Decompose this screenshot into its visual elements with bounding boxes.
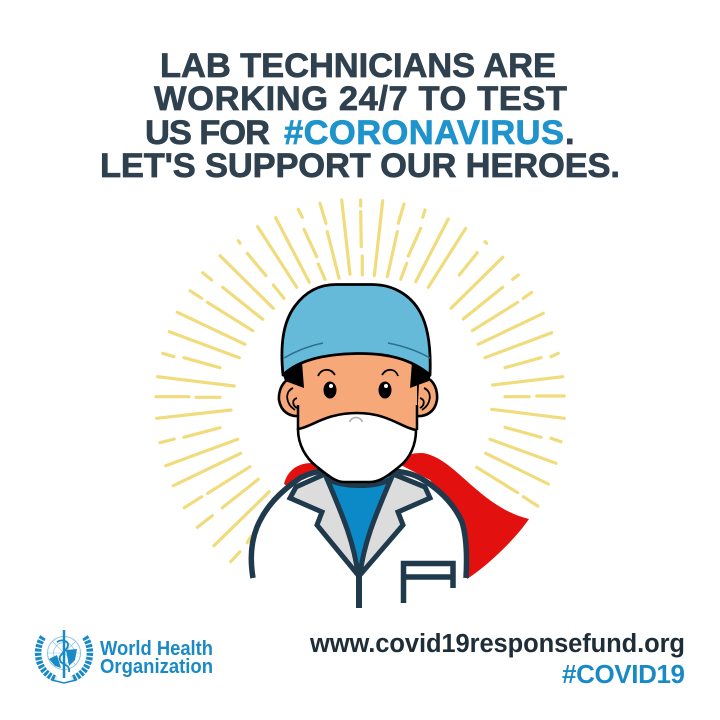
hashtag in title: #CORONAVIRUS xyxy=(284,114,564,152)
sunburst rays xyxy=(156,200,564,562)
coat centre line xyxy=(356,572,362,608)
WHO emblem xyxy=(38,630,90,683)
title xyxy=(100,47,620,185)
coat outline xyxy=(251,471,467,578)
COVID19 hashtag: #COVID19 xyxy=(562,659,685,689)
eyes xyxy=(324,382,392,398)
face mask xyxy=(298,413,416,482)
title: LET'S SUPPORT OUR HEROES. xyxy=(100,147,620,185)
cap folds xyxy=(284,343,430,358)
title: . xyxy=(565,114,575,152)
WHO logo xyxy=(38,630,213,683)
coat lapels xyxy=(290,474,430,575)
surgical cap xyxy=(282,284,430,375)
fund website: www.covid19responsefund.org xyxy=(309,630,685,658)
face outline xyxy=(298,405,417,430)
red cape xyxy=(284,453,529,579)
eyebrows xyxy=(318,370,398,376)
coat pocket xyxy=(403,564,453,603)
title: WORKING 24/7 TO TEST xyxy=(154,80,567,118)
hair xyxy=(283,362,431,388)
blue shirt xyxy=(326,476,392,572)
title: US FOR xyxy=(145,114,270,152)
ears xyxy=(279,377,437,416)
WHO wordmark xyxy=(100,637,213,678)
mask nose crease xyxy=(350,418,362,422)
white lab coat xyxy=(251,471,467,608)
lab technician hero illustration xyxy=(251,284,529,608)
title: LAB TECHNICIANS ARE xyxy=(160,47,556,85)
WHO wordmark: Organization xyxy=(100,655,213,678)
face xyxy=(298,345,417,432)
WHO wordmark: World Health xyxy=(100,637,213,660)
shirt collar xyxy=(326,478,392,486)
